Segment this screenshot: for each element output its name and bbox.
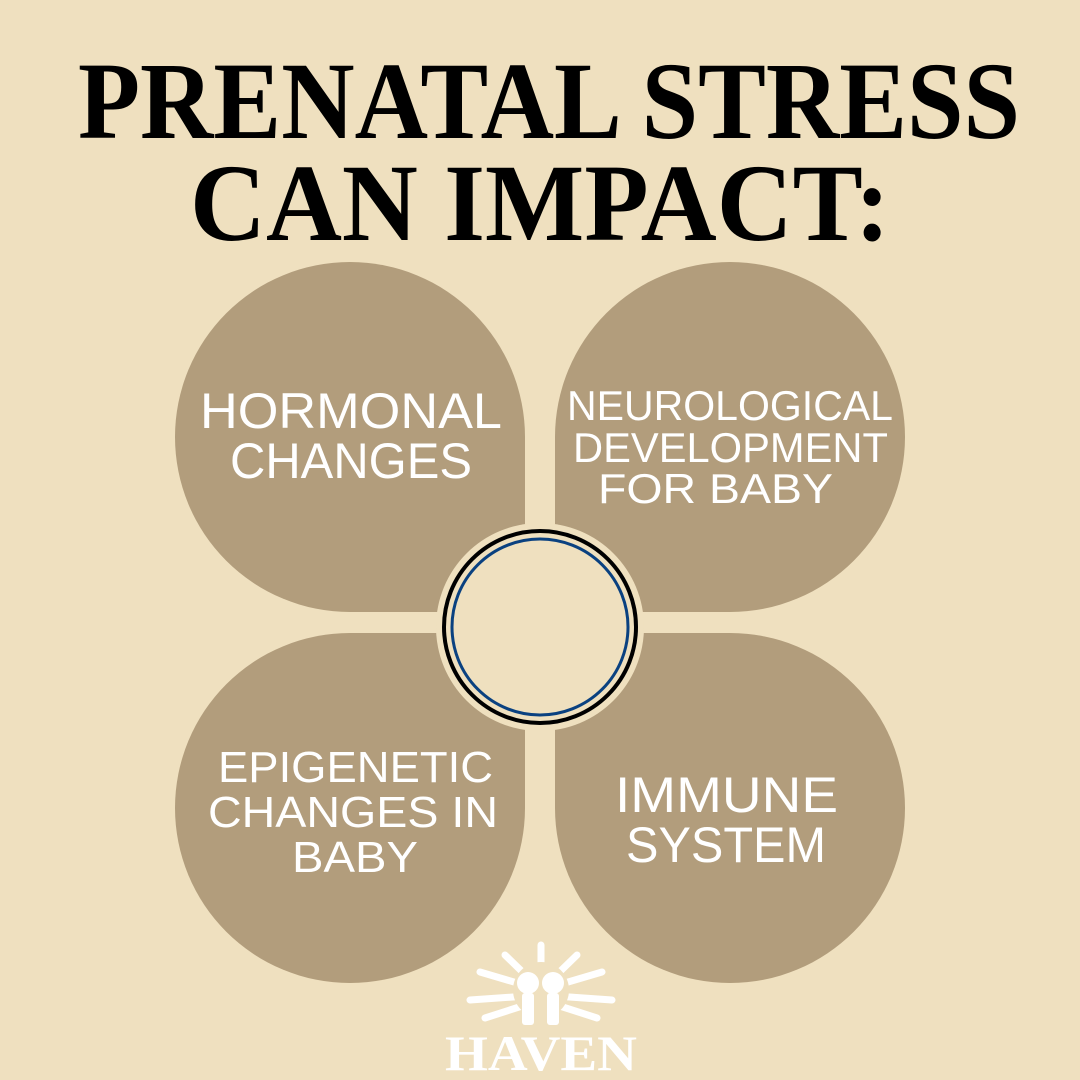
panel: neurological development: FOR BABY xyxy=(598,465,833,512)
panel: immune system xyxy=(555,633,905,983)
panel: neurological development: NEUROLOGICAL xyxy=(567,382,893,429)
panel: neurological development: DEVELOPMENT xyxy=(573,424,888,471)
panel: immune system: SYSTEM xyxy=(626,817,826,873)
panel: epigenetic changes: CHANGES IN xyxy=(208,788,498,837)
panel: epigenetic changes xyxy=(175,633,525,983)
logo: haven xyxy=(445,945,637,1080)
panel: hormonal changes xyxy=(175,262,525,612)
panel: neurological development xyxy=(555,262,905,612)
logo: haven: HAVEN xyxy=(445,1025,637,1080)
panel: hormonal changes: CHANGES xyxy=(230,433,472,489)
center circle xyxy=(436,523,644,731)
panel: immune system: IMMUNE xyxy=(615,767,838,823)
panel: hormonal changes: HORMONAL xyxy=(200,383,502,439)
title xyxy=(78,40,1020,264)
panel: epigenetic changes: BABY xyxy=(292,833,418,882)
panel: epigenetic changes: EPIGENETIC xyxy=(218,743,493,792)
title: PRENATAL STRESS xyxy=(78,40,1020,162)
title: CAN IMPACT: xyxy=(190,142,890,264)
